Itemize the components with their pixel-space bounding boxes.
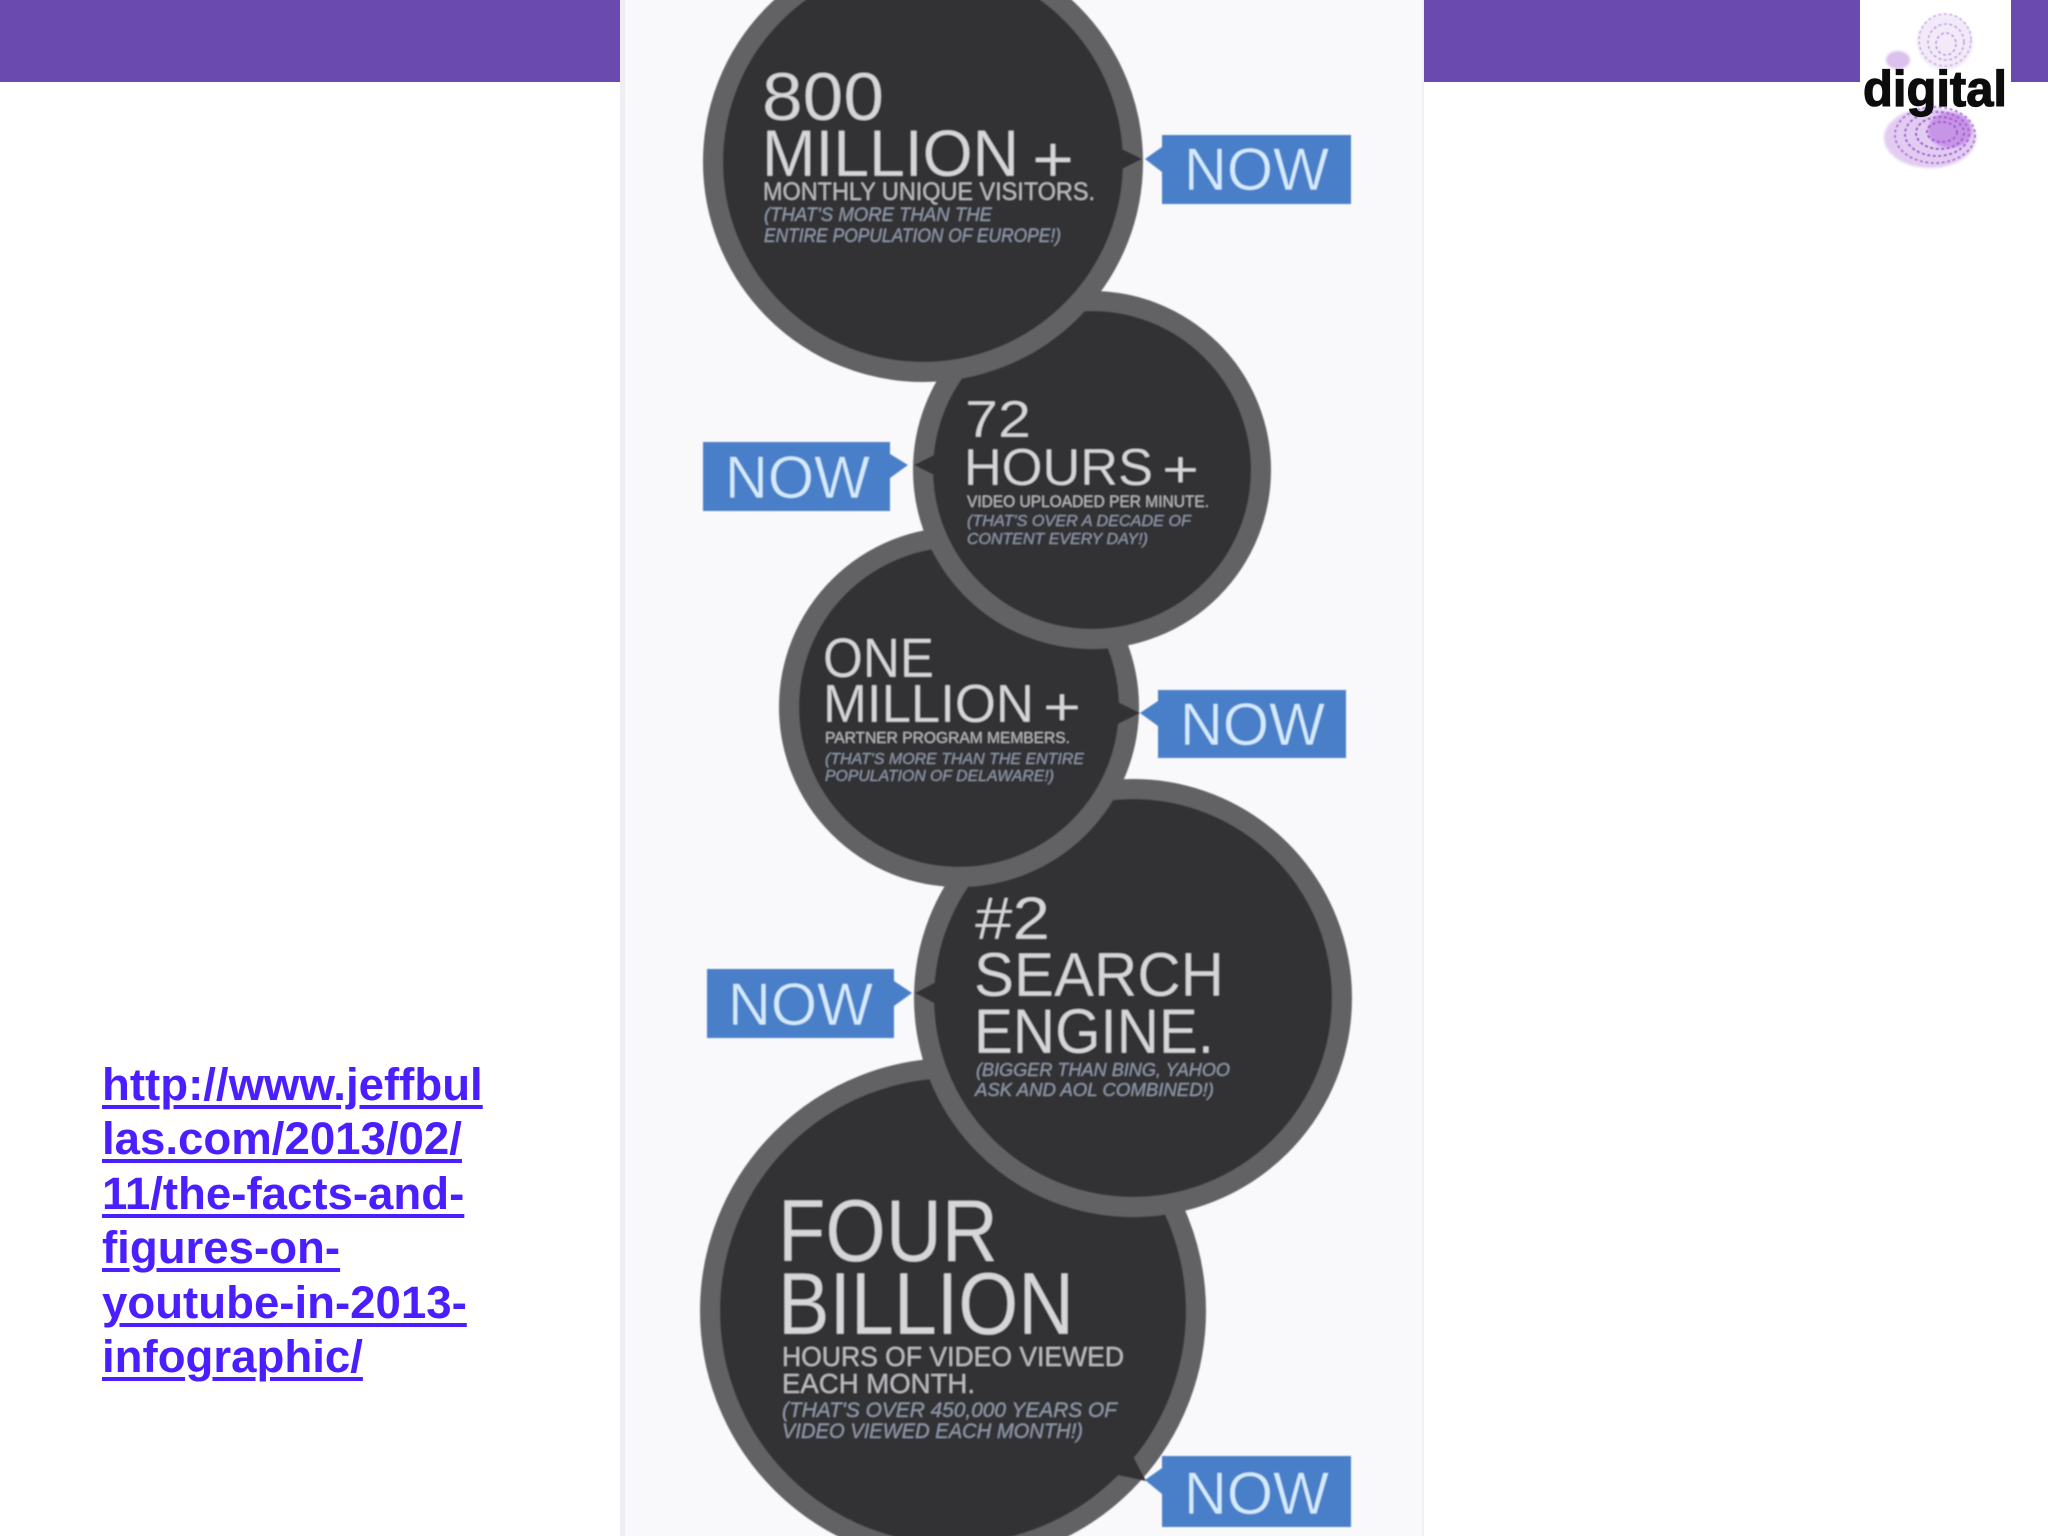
subtext line two: EACH MONTH. (782, 1368, 975, 1399)
ring (789, 537, 1129, 877)
note line two: POPULATION OF DELAWARE!) (825, 768, 1054, 785)
headline line two: HOURS (964, 439, 1153, 497)
ring (924, 789, 1342, 1207)
headline line two: BILLION (778, 1254, 1074, 1353)
headline: 72 (965, 391, 1031, 449)
callout: NOW 2 (703, 442, 908, 511)
callout box (707, 969, 912, 1038)
source link text: 11/the-facts-and- (102, 1168, 464, 1219)
note: (THAT'S MORE THAN THE (764, 205, 992, 226)
header bar right (1424, 0, 2048, 82)
note line two: ASK AND AOL COMBINED!) (974, 1080, 1214, 1100)
headline line three: ENGINE. (974, 997, 1214, 1067)
headline: ONE (823, 626, 934, 689)
callout box (1145, 135, 1351, 204)
logo background (1860, 0, 2011, 200)
source link text: las.com/2013/02/ (102, 1113, 462, 1164)
panel right edge (1422, 0, 1424, 1536)
note: (THAT'S MORE THAN THE ENTIRE (825, 751, 1085, 768)
note line two: VIDEO VIEWED EACH MONTH!) (782, 1420, 1083, 1443)
ring (710, 1068, 1196, 1536)
plus sign: + (1162, 441, 1199, 499)
subtext: VIDEO UPLOADED PER MINUTE. (967, 492, 1209, 511)
notch (915, 982, 936, 1004)
callout: NOW 4 (707, 969, 912, 1038)
notch (914, 455, 934, 475)
source link text (102, 1058, 483, 1382)
note line two: ENTIRE POPULATION OF EUROPE!) (764, 226, 1061, 247)
subtext: PARTNER PROGRAM MEMBERS. (825, 730, 1070, 747)
notch (1108, 1456, 1146, 1481)
infographic circles (703, 0, 1351, 1536)
headline line two: MILLION (762, 116, 1019, 190)
logo wordmark: digital (1863, 61, 2007, 117)
note: (THAT'S OVER 450,000 YEARS OF (782, 1399, 1118, 1422)
notch (1120, 148, 1142, 170)
ring (713, 0, 1133, 372)
circle: 72 hours (914, 301, 1261, 639)
note: (BIGGER THAN BING, YAHOO (976, 1060, 1230, 1080)
callout label: NOW (728, 971, 873, 1038)
circle: one million (789, 537, 1140, 877)
note line two: CONTENT EVERY DAY!) (967, 531, 1148, 548)
logo (1860, 0, 2011, 200)
callout label: NOW (725, 444, 870, 511)
ring (923, 301, 1261, 639)
headline: FOUR (778, 1181, 998, 1280)
callout box (703, 442, 908, 511)
subtext: HOURS OF VIDEO VIEWED (782, 1341, 1124, 1372)
subtext: MONTHLY UNIQUE VISITORS. (763, 178, 1095, 206)
source link text: youtube-in-2013- (102, 1277, 467, 1328)
circle: search engine (915, 789, 1342, 1207)
headline: 800 (762, 59, 884, 135)
icon: fingerprint (1884, 14, 1976, 168)
callout box (1140, 690, 1346, 758)
callout: NOW 5 (1145, 1456, 1351, 1527)
infographic panel background (620, 0, 1424, 1536)
callout: NOW 3 (1140, 690, 1346, 758)
callout label: NOW (1184, 1460, 1329, 1527)
source link text: infographic/ (102, 1331, 363, 1382)
circle: 800 million (713, 0, 1142, 372)
callout label: NOW (1184, 136, 1329, 203)
callout box (1145, 1456, 1351, 1527)
notch (1118, 702, 1140, 724)
panel left edge (620, 0, 625, 1536)
headline: #2 (975, 885, 1050, 952)
source link text: figures-on- (102, 1222, 340, 1273)
plus sign: + (1043, 677, 1081, 737)
callout: NOW 1 (1145, 135, 1351, 204)
note: (THAT'S OVER A DECADE OF (967, 513, 1192, 530)
plus sign: + (1032, 122, 1074, 196)
header bar left (0, 0, 620, 82)
source link text: http://www.jeffbul (102, 1058, 483, 1110)
headline line two: SEARCH (974, 941, 1224, 1010)
callout label: NOW (1180, 691, 1325, 758)
circle: four billion (710, 1068, 1196, 1536)
headline line two: MILLION (823, 674, 1034, 734)
